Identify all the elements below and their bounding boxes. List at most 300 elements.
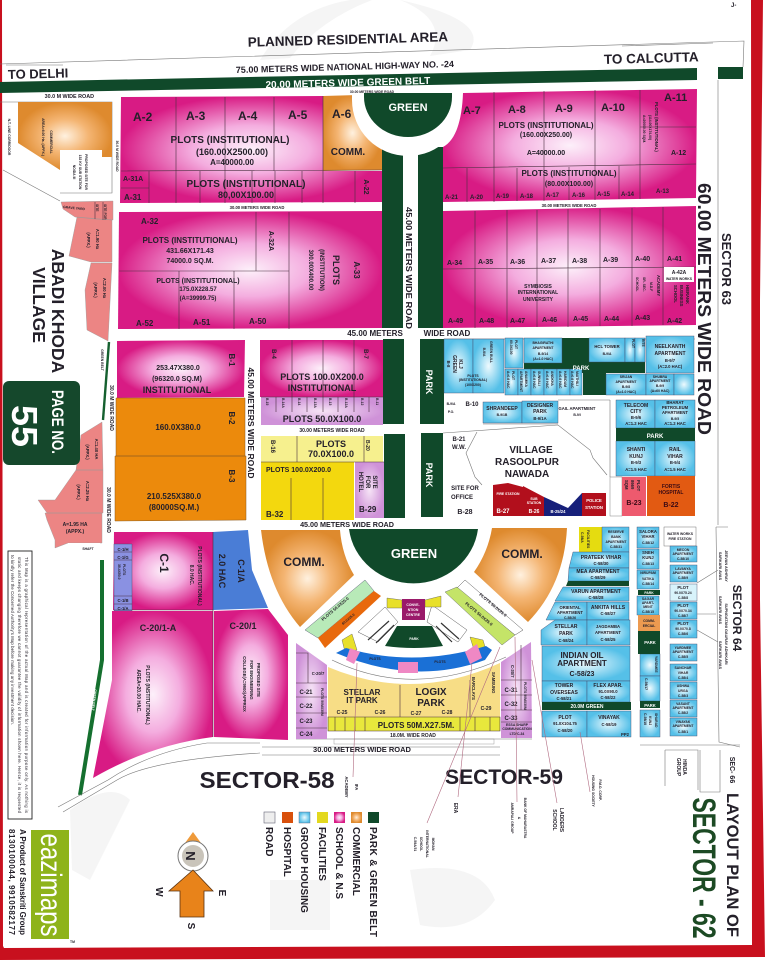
panel: group housing C-58 third column: FIRE STATION bbox=[668, 537, 692, 541]
panel: group housing C-58 second column: NIRUPAM bbox=[640, 571, 656, 575]
central plots and convention centre: CENTRE bbox=[406, 613, 421, 617]
green belt along highway bbox=[0, 67, 743, 94]
panel: lilac plots C-30 to C-33: C-31 bbox=[504, 688, 518, 694]
panel: group housing C-58 second column: SALORA bbox=[639, 529, 657, 534]
disclaimer box: This Map is a graphical representation of the actual Map and is created for information purpose only. As nothing is bbox=[24, 557, 29, 813]
pointer lines and tenant labels bbox=[344, 637, 602, 858]
panel: blocks A-32 to A-33 and A-50 to A-52: PLOTS (INSTITUTIONAL) bbox=[142, 236, 238, 245]
panel: lilac plots C-30 to C-33: COMMUNICATION bbox=[502, 727, 532, 731]
pointer lines and tenant labels: BANK OF MAHARASTRA bbox=[523, 798, 527, 839]
panel: group housing C-58 main column: C-58/22 bbox=[601, 695, 616, 700]
green belt along highway: 30.00 METERS WIDE ROAD bbox=[350, 90, 395, 94]
panel: blocks B-16 to B-32: PLOTS bbox=[316, 439, 346, 449]
panel: group housing B-8 to B-9: (100X200) bbox=[465, 383, 481, 387]
panel: Village Rasoolpur Nawada: 8669 bbox=[630, 480, 635, 490]
icon: compass: S bbox=[185, 923, 196, 930]
panel: group housing C-58 third column: YARDMEE bbox=[675, 646, 692, 650]
panel: group housing C-58 third column: WATER WORKS bbox=[667, 532, 694, 536]
panel: blocks A-2 to A-31 and A-6: PLOTS (INSTITUTIONAL) bbox=[171, 135, 289, 146]
legend: COMMERCIAL bbox=[350, 827, 361, 896]
panel: blocks A-32 to A-33 and A-50 to A-52: 431.66X171.43 bbox=[166, 248, 214, 255]
corner mark: J- bbox=[731, 3, 736, 9]
panel: blocks A-2 to A-31 and A-6: 80,00X100.00 bbox=[218, 190, 274, 200]
text: 30.00 METERS WIDE ROAD bbox=[299, 428, 365, 434]
panel: IT parks and lower plots: C-25 bbox=[337, 710, 348, 716]
panel: Village Rasoolpur Nawada: SQM bbox=[624, 480, 629, 490]
panel: blocks B-4 to B-15: B-12A bbox=[344, 398, 348, 408]
panel: C-1 and C-20 institutional plots: C-1/A bbox=[118, 606, 128, 611]
pointer lines and tenant labels: HOUSING SOCIETY bbox=[591, 775, 595, 808]
panel: blocks B-4 to B-15: B-4 bbox=[270, 349, 276, 359]
panel: group housing C-58 third column: C-58/4 bbox=[678, 676, 688, 680]
panel: blocks B-1 to B-3: B-3 bbox=[227, 470, 236, 483]
panel: salmon plots left: A=1.95 HA bbox=[63, 522, 88, 528]
panel: Village Rasoolpur Nawada: NAWADA bbox=[505, 469, 549, 480]
panel: group housing C-58 third column: VASANT bbox=[676, 702, 691, 706]
panel: blocks A-34 to A-49: A-34 bbox=[447, 260, 462, 267]
label: Abadi Khoda village: ABADI KHODA bbox=[48, 249, 68, 374]
panel: salmon plots left: (APPX.) bbox=[93, 282, 98, 298]
panel: group housing C-58 third column: C-58/5 bbox=[678, 655, 688, 659]
panel: group housing C-58 third column: 90.0X75.24 bbox=[674, 591, 692, 595]
panel: blocks A-34 to A-49: UNIVERSITY bbox=[523, 297, 554, 303]
label: sector 64 and housing notes: SUPNGATANI GAURAV ADHIKARI bbox=[724, 603, 728, 665]
panel: Village Rasoolpur Nawada: SUB bbox=[530, 497, 538, 501]
panel: blocks A-7 to A-21: A-15 bbox=[597, 192, 611, 198]
panel: group housing C-58 third column: C-58/3 bbox=[678, 694, 688, 698]
panel: IT parks and lower plots: PARK bbox=[417, 698, 446, 709]
panel: group housing B-8 to B-9: APARTMENT bbox=[532, 346, 554, 350]
panel: blocks A-7 to A-21: A-17 bbox=[546, 193, 560, 199]
panel: group housing B-8 to B-9: A=0.6 HAC bbox=[532, 371, 536, 389]
panel: blocks B-4 to B-15: B-14 bbox=[297, 398, 301, 405]
panel: blocks B-4 to B-15 bbox=[260, 339, 404, 425]
panel: group housing B-8 to B-9: ANAMIKA bbox=[524, 371, 528, 388]
central green semicircle and strips: 45.00 METERS WIDE ROAD bbox=[404, 207, 413, 329]
panel: blocks A-7 to A-21: (80.00X100.00) bbox=[545, 181, 593, 188]
panel: group housing C-58 main column: INDIAN OIL bbox=[560, 651, 604, 660]
panel: commercial site top left: 30.0 M WIDE ROAD bbox=[115, 140, 119, 172]
panel: group housing B-8 to B-9: SUNVALI bbox=[537, 371, 541, 386]
label: sector 63: SECTOR 63 bbox=[719, 233, 734, 305]
panel: commercial site top left: PROPOSED SITE FOR bbox=[84, 154, 88, 190]
road label: 45 meters vertical: 45.00 METERS WIDE ROAD bbox=[246, 368, 256, 478]
panel: blocks A-7 to A-21: A-9 bbox=[555, 103, 573, 115]
panel: IT parks and lower plots: SAMSUNG bbox=[491, 672, 496, 693]
panel: blocks B-16 to B-32: B-16 bbox=[269, 440, 275, 454]
panel: group housing C-58 second column: APART- bbox=[642, 601, 654, 605]
green belt and left road labels: 30.0 M WIDE ROAD bbox=[108, 385, 114, 431]
panel: blocks A-7 to A-21: A-12 bbox=[671, 150, 686, 157]
panel: blocks A-32 to A-33 and A-50 to A-52: A-52 bbox=[136, 319, 154, 328]
panel: blocks A-34 to A-49: A-41 bbox=[667, 256, 682, 263]
panel: blocks A-7 to A-21: A-8 bbox=[508, 104, 526, 116]
panel: group housing C-58 second column: SAGAR bbox=[642, 597, 655, 601]
panel: C-1 and C-20 institutional plots: C-1/G bbox=[117, 555, 129, 560]
commercial sector right: COMM. bbox=[501, 547, 543, 561]
panel: lilac plots C-30 to C-33: C-30/7 bbox=[510, 665, 515, 678]
panel: blocks A-34 to A-49: INTERNATIONAL bbox=[518, 290, 558, 296]
panel: IT parks and lower plots: IT PARK bbox=[346, 696, 378, 705]
panel: blocks A-32 to A-33 and A-50 to A-52: 300.00X400.00 bbox=[307, 250, 313, 291]
panel: group housing C-58 second column: ERCIAL bbox=[643, 624, 655, 628]
panel: group housing C-58 main column: C-58/20 bbox=[558, 728, 573, 733]
pointer lines and tenant labels: INTERNATIONAL bbox=[425, 830, 429, 858]
panel: group housing B-8 to B-9: A=1.2 HAC bbox=[625, 421, 647, 426]
panel: Village Rasoolpur Nawada: B-23 bbox=[626, 500, 642, 507]
panel: blocks A-34 to A-49: SR. SEC. bbox=[642, 277, 646, 292]
panel: group housing B-8 to B-9: A=0.6 HAC bbox=[545, 371, 549, 389]
panel: group housing C-58 third column: C-58/10 bbox=[677, 557, 689, 561]
panel: lilac plots C-30 to C-33: LTD/C-34 bbox=[510, 732, 524, 736]
label: sector 64 and housing notes: JEEVAN ASHRAY bbox=[724, 550, 728, 582]
pointer lines and tenant labels: ERA bbox=[452, 803, 458, 814]
panel: blocks A-32 to A-33 and A-50 to A-52: A-33 bbox=[352, 261, 361, 279]
panel: blocks A-2 to A-31 and A-6: A-3 bbox=[186, 109, 206, 123]
central plots and convention centre: CONVE- bbox=[406, 603, 420, 607]
panel: group housing C-58 third column: APARTMENT bbox=[672, 724, 694, 728]
panel: C-1 and C-20 institutional plots: 8.0 HAC. bbox=[188, 565, 194, 586]
panel: group housing C-58 second column: C-58/13 bbox=[642, 562, 654, 566]
panel: group housing C-58 main column: PLOT bbox=[558, 715, 572, 721]
panel: blocks A-7 to A-21: A-10 bbox=[601, 102, 625, 114]
pointer lines and tenant labels: & bbox=[517, 817, 521, 820]
central green amphitheatre bbox=[349, 529, 478, 583]
heading: layout plan of sector 62: LAYOUT PLAN OF bbox=[723, 793, 742, 937]
panel: group housing B-8 to B-9: BHAGIRATHI bbox=[532, 341, 554, 345]
panel: C-1 and C-20 institutional plots: COLLEGE(A=9900)APPROX bbox=[242, 656, 247, 712]
panel: group housing B-8 to B-9: 60.0X100 bbox=[509, 340, 513, 355]
panel: blocks A-34 to A-49: SCHOOL bbox=[673, 285, 678, 303]
panel: group housing B-8 to B-9: PLOTS bbox=[467, 374, 479, 378]
panel: blocks A-34 to A-49: A-37 bbox=[541, 258, 556, 265]
panel: group housing C-58 second column: MENT bbox=[643, 605, 654, 609]
panel: blocks A-7 to A-21: PLOTS (INSTITUTIONAL) bbox=[521, 169, 617, 178]
panel: blocks A-2 to A-31 and A-6: A-31 bbox=[124, 193, 142, 202]
road label: 30 meters wide road bottom: 30.00 METERS WIDE ROAD bbox=[313, 745, 412, 754]
panel: blocks B-1 to B-3: B-2 bbox=[227, 412, 236, 425]
panel: group housing C-58 main column: APARTMENT bbox=[557, 610, 583, 615]
label: sector 64 and housing notes: SARKARI AVAS bbox=[718, 641, 722, 670]
panel: blocks B-16 to B-32: 70.0X100.0 bbox=[308, 449, 354, 459]
panel: group housing C-58 third column: C-58/2 bbox=[678, 711, 688, 715]
road label: 45 meters wide road: 45.00 METERS bbox=[347, 329, 403, 338]
panel: blocks A-34 to A-49: A-45 bbox=[573, 316, 588, 323]
commercial sector left bbox=[261, 530, 354, 627]
panel: blocks A-7 to A-21: A=20000.00 SQM. bbox=[642, 115, 646, 143]
panel: group housing C-58 second column: C-58/17 bbox=[644, 678, 648, 690]
national highway road: 75.00 METERS WIDE NATIONAL HIGH-WAY NO. -24 bbox=[236, 59, 454, 75]
panel: group housing C-58 main column: VINAYAK bbox=[598, 715, 620, 721]
panel: group housing C-58 third column: 90.0X70.34 bbox=[674, 609, 692, 613]
panel: group housing C-58 main column: APARTMENT bbox=[557, 659, 607, 668]
panel: group housing C-58 main column: VARUN APARTMENT bbox=[571, 589, 621, 595]
logo: eazimaps: eazimaps bbox=[34, 834, 67, 936]
panel: blocks B-16 to B-32 bbox=[261, 434, 405, 520]
panel: blocks A-32 to A-33 and A-50 to A-52: 74000.0 SQ.M. bbox=[166, 258, 214, 265]
panel: group housing C-58 main column: ORIENTAL bbox=[559, 605, 581, 610]
panel: group housing B-8 to B-9: A=1.5 HAC bbox=[625, 467, 647, 472]
panel: blocks B-16 to B-32: B-20 bbox=[364, 440, 370, 451]
panel: lilac plots C-21 to C-24: PLOTS 50MX30M bbox=[320, 688, 324, 716]
panel: salmon plots left bbox=[38, 201, 113, 558]
panel: blocks A-34 to A-49: A-48 bbox=[479, 318, 494, 325]
panel: group housing B-8 to B-9: A=0.6 HAC bbox=[506, 371, 510, 389]
panel: commercial site top left: 30.0 M WIDE ROAD bbox=[45, 94, 94, 100]
panel: group housing B-8 to B-9: SRIJAN bbox=[620, 375, 633, 379]
panel: blocks B-1 to B-3: 160.0X380.0 bbox=[155, 423, 201, 432]
panel: group housing C-58 third column: APARTMENT bbox=[672, 571, 694, 575]
panel: group housing C-58 main column: C-58/19 bbox=[602, 722, 617, 727]
panel: blocks B-1 to B-3: (80000SQ.M.) bbox=[149, 503, 199, 512]
panel: blocks A-7 to A-21: A-16 bbox=[572, 193, 586, 199]
panel: group housing B-8 to B-9: KLJ bbox=[457, 359, 463, 369]
central green semicircle and strips: GREEN bbox=[388, 102, 428, 114]
panel: lilac plots C-21 to C-24: C-24 bbox=[299, 732, 313, 738]
panel: C-1 and C-20 institutional plots: 35.4X50.0 bbox=[117, 564, 121, 580]
panel: commercial site top left bbox=[0, 94, 119, 201]
pointer lines and tenant labels: ACADEMY bbox=[344, 776, 349, 798]
panel: group housing B-8 to B-9: SHANTI bbox=[627, 447, 646, 453]
panel: salmon plots left: GRAVE YARD bbox=[63, 205, 86, 211]
panel: salmon plots left: SITE bbox=[95, 204, 99, 212]
panel: C-1 and C-20 institutional plots: C-1 bbox=[157, 553, 171, 573]
panel: blocks A-34 to A-49: SCHOOL bbox=[635, 277, 639, 292]
panel: blocks A-32 to A-33 and A-50 to A-52: A-32A bbox=[267, 231, 274, 251]
panel: IT parks and lower plots: PLOTS 50M.X27.5M. bbox=[378, 721, 454, 730]
label: Hinda group and Sec-66: SEC- 66 bbox=[728, 757, 735, 783]
pointer lines and tenant labels: SCHOOL bbox=[551, 809, 557, 831]
panel: group housing C-58 second column: C-58/12 bbox=[642, 541, 654, 545]
panel: group housing B-8 to B-9: GAIL APARTMENT bbox=[559, 406, 596, 411]
panel: group housing C-58 second column: VATIKA bbox=[642, 577, 655, 581]
panel: IT parks and lower plots: C-28 bbox=[442, 710, 453, 716]
panel: blocks B-16 to B-32: FOR bbox=[364, 476, 370, 489]
panel: group housing B-8 to B-9: B-9/A bbox=[447, 402, 456, 406]
logo: eazimaps: TM bbox=[70, 940, 75, 944]
panel: salmon plots left: (APPX.) bbox=[86, 232, 91, 248]
panel: group housing B-8 to B-9: B-9/4 bbox=[670, 460, 681, 465]
panel: group housing B-8 to B-9: PARK bbox=[573, 366, 590, 372]
panel: lilac plots C-21 to C-24: C-20/7 bbox=[312, 671, 325, 676]
panel: group housing C-58 main column: 91.0X104.75 bbox=[553, 721, 578, 726]
panel: blocks A-34 to A-49: A-47 bbox=[510, 318, 525, 325]
panel: group housing C-58 main column: TOWER bbox=[555, 683, 574, 689]
icon: compass bbox=[153, 832, 227, 930]
panel: blocks B-1 to B-3: INSTITUTIONAL bbox=[143, 385, 212, 395]
panel: group housing C-58 second column: PARK bbox=[644, 640, 656, 645]
panel: park strips: PARK bbox=[424, 370, 434, 395]
panel: group housing B-8 to B-9: B-9/8 bbox=[622, 385, 630, 389]
panel: group housing B-8 to B-9: PLOT bbox=[631, 339, 635, 349]
legend: PARK & GREEN BELT bbox=[367, 827, 378, 937]
panel: Village Rasoolpur Nawada: B-26 bbox=[529, 509, 540, 515]
panel: group housing C-58 second column: PARK bbox=[644, 703, 656, 708]
panel: salmon plots left: A=1.40 HA bbox=[94, 439, 99, 459]
panel: group housing B-8 to B-9: A=1.5 HAC bbox=[664, 467, 686, 472]
central plots and convention centre bbox=[305, 580, 523, 673]
panel: group housing C-58 main column: C-58/24 bbox=[559, 638, 574, 643]
panel: group housing B-8 to B-9: NEELKANTH bbox=[655, 344, 686, 350]
panel: blocks A-34 to A-49: WATER WORKS bbox=[666, 277, 693, 281]
panel: IT parks and lower plots: 18.0M. WIDE ROAD bbox=[390, 733, 436, 739]
panel: blocks A-34 to A-49: SYMBIOSIS bbox=[524, 284, 553, 290]
text: 30.00 METERS WIDE ROAD bbox=[542, 203, 596, 208]
central plots and convention centre: PLOTS 50.0X25.0 bbox=[478, 592, 508, 618]
panel: blocks A-34 to A-49: A-42 bbox=[667, 318, 682, 325]
contact text: 8130100044, 9910582177 bbox=[7, 829, 16, 936]
panel: Village Rasoolpur Nawada: B-25/24 bbox=[551, 509, 566, 514]
panel: Village Rasoolpur Nawada: W.W. bbox=[452, 445, 466, 451]
panel: blocks B-4 to B-15: B-15 bbox=[265, 398, 269, 405]
panel: blocks A-7 to A-21: A-11 bbox=[664, 92, 687, 104]
panel: blocks A-32 to A-33 and A-50 to A-52: (A=39999.75) bbox=[180, 296, 216, 302]
panel: group housing C-58 second column: SHARAD bbox=[654, 713, 658, 728]
panel: group housing B-8 to B-9: B-9/6 bbox=[631, 415, 642, 420]
panel: blocks A-2 to A-31 and A-6 bbox=[120, 95, 382, 203]
logo: eazimaps bbox=[31, 830, 75, 944]
panel: group housing B-8 to B-9: HARIDAM bbox=[563, 371, 567, 387]
panel: group housing B-8 to B-9: HCL TOWER bbox=[594, 344, 620, 349]
panel: blocks A-7 to A-21: A-21 bbox=[445, 195, 459, 201]
panel: blocks A-7 to A-21: A-20 bbox=[470, 195, 484, 201]
panel: blocks B-4 to B-15: B-12 bbox=[360, 398, 364, 405]
panel: group housing C-58 third column: PLOT bbox=[677, 603, 689, 608]
panel: group housing C-58 main column: PP2 bbox=[621, 732, 630, 737]
panel: group housing B-8 to B-9: B-8/A bbox=[482, 348, 486, 357]
disclaimer box: static and keeps changing therefore we cannot guarantee the validity of information shown here. Hence, it is requested bbox=[17, 557, 22, 814]
panel: lilac plots C-21 to C-24: C-21 bbox=[299, 690, 313, 696]
panel: lilac plots C-21 to C-24: C-23 bbox=[299, 719, 313, 725]
panel: group housing C-58 third column: C-58/8 bbox=[678, 596, 688, 600]
panel: group housing C-58 main column: APARTMENT bbox=[595, 630, 621, 635]
panel: C-1 and C-20 institutional plots: C-20/1 bbox=[229, 621, 257, 631]
panel: group housing C-58 third column: C-58/1 bbox=[678, 730, 688, 734]
pointer lines and tenant labels: P.M.O. CORP. bbox=[598, 779, 602, 801]
text: 30.00 METERS WIDE ROAD bbox=[230, 205, 284, 210]
panel: group housing B-8 to B-9: APARTMENT bbox=[662, 410, 688, 415]
panel: group housing B-8 to B-9: B-8 bbox=[446, 361, 451, 368]
panel: lilac plots C-30 to C-33: PLOTS 50MX30M bbox=[523, 682, 527, 710]
panel: group housing B-8 to B-9: GREEN bbox=[451, 355, 457, 373]
central plots and convention centre: PLOTS bbox=[369, 657, 381, 661]
panel: group housing C-58 main column: C-58/26 bbox=[564, 616, 576, 620]
panel: Village Rasoolpur Nawada: OFFICE bbox=[451, 495, 473, 501]
road label: 45 meters wide road: WIDE ROAD bbox=[424, 329, 471, 338]
panel: group housing C-58 third column: PLOT bbox=[677, 621, 689, 626]
commercial sector right bbox=[474, 528, 567, 622]
green belt along highway: 20.00 METERS WIDE GREEN BELT bbox=[265, 76, 430, 91]
panel: group housing C-58 third column: C-58/9 bbox=[678, 576, 688, 580]
legend bbox=[263, 812, 379, 937]
panel: C-1 and C-20 institutional plots: C-1/H bbox=[118, 547, 128, 552]
panel: blocks A-7 to A-21: (160.00X250.00) bbox=[520, 132, 572, 139]
label: sector 64 and housing notes: SECTOR 64 bbox=[730, 585, 744, 652]
panel: group housing C-58 third column: VIHAR bbox=[678, 671, 689, 675]
panel: group housing C-58 main column: 20.0M GREEN bbox=[570, 704, 604, 710]
panel: Village Rasoolpur Nawada: B-28 bbox=[457, 509, 473, 516]
panel: Village Rasoolpur Nawada: B-21 bbox=[452, 437, 466, 443]
panel: blocks A-34 to A-49: A-38 bbox=[572, 258, 587, 265]
panel: group housing B-8 to B-9 bbox=[443, 336, 695, 485]
panel: blocks A-7 to A-21: A-18 bbox=[520, 194, 534, 200]
panel: group housing B-8 to B-9: B-10 bbox=[465, 402, 479, 408]
panel: Village Rasoolpur Nawada: RASOOLPUR bbox=[495, 457, 560, 468]
panel: blocks A-2 to A-31 and A-6: A-6 bbox=[332, 107, 352, 121]
panel: blocks A-7 to A-21: PLOTS (INSTITUTIONAL) bbox=[498, 121, 594, 130]
panel: group housing C-58 main column: C-58/21 bbox=[557, 696, 572, 701]
panel: lilac plots C-30 to C-33: C-33 bbox=[504, 716, 518, 722]
central plots and convention centre: PLOTS 50.0X25.0 bbox=[464, 601, 494, 627]
panel: group housing C-58 second column: SNEH bbox=[642, 550, 654, 555]
panel: lilac plots C-30 to C-33: C-32 bbox=[504, 702, 518, 708]
panel: blocks A-32 to A-33 and A-50 to A-52: PLOTS bbox=[331, 255, 341, 285]
panel: group housing C-58 second column: KUNJ bbox=[642, 555, 654, 560]
panel: salmon plots left: A=1.90 Ha bbox=[95, 229, 100, 250]
pointer lines and tenant labels: LADDERS bbox=[558, 808, 564, 833]
panel: blocks B-16 to B-32: HOTEL bbox=[357, 472, 363, 492]
panel: group housing C-58 third column: MECON bbox=[677, 548, 690, 552]
panel: group housing B-8 to B-9: GREEN BULL bbox=[489, 341, 493, 363]
panel: IT parks and lower plots: LOGIX bbox=[415, 687, 447, 698]
panel: group housing B-8 to B-9: B-9/A bbox=[603, 352, 612, 356]
panel: salmon plots left: A=2.25 Ha bbox=[85, 481, 90, 502]
panel: blocks A-32 to A-33 and A-50 to A-52: A-50 bbox=[249, 317, 267, 326]
label: Hinda group and Sec-66: HINDA bbox=[681, 759, 687, 775]
panel: blocks B-1 to B-3: 210.525X380.0 bbox=[147, 492, 202, 501]
panel: group housing C-58 main column: PARK bbox=[559, 631, 573, 637]
panel: group housing C-58 third column: USHWA bbox=[677, 684, 690, 688]
central green amphitheatre: GREEN bbox=[391, 546, 437, 561]
panel: blocks B-1 to B-3 bbox=[115, 340, 246, 521]
panel: group housing B-8 to B-9: APARTMENT bbox=[519, 371, 523, 393]
panel: group housing B-8 to B-9: B-9/5 bbox=[671, 417, 679, 421]
disclaimer box bbox=[8, 551, 32, 819]
panel: group housing C-58 second column bbox=[637, 527, 660, 737]
panel: blocks A-32 to A-33 and A-50 to A-52: PLOTS (INSTITUTIONAL) bbox=[156, 278, 240, 285]
label: sector 64 and housing notes: SARKARI AVAS bbox=[718, 596, 722, 625]
panel: lilac plots C-30 to C-33: ESSA SHARP bbox=[506, 723, 529, 727]
panel: Village Rasoolpur Nawada: HOSPITAL bbox=[659, 490, 683, 496]
panel: group housing B-8 to B-9: B-9/1A bbox=[533, 416, 547, 421]
panel: blocks A-34 to A-49: HIERANK bbox=[685, 285, 690, 304]
label: Abadi Khoda village: VILLAGE bbox=[29, 267, 49, 343]
panel: group housing C-58 second column: C-58/18 bbox=[643, 713, 647, 725]
panel: Village Rasoolpur Nawada: PLOT bbox=[636, 480, 641, 492]
panel: blocks B-4 to B-15: B-13A bbox=[313, 398, 317, 408]
panel: group housing B-8 to B-9: KUNJ bbox=[629, 454, 643, 460]
commercial sector left: COMM. bbox=[283, 555, 325, 569]
label: Abadi Khoda village bbox=[29, 249, 68, 374]
icon: compass: N bbox=[183, 851, 198, 861]
panel: blocks A-7 to A-21: A-19 bbox=[496, 194, 510, 200]
panel: group housing C-58 third column: LAVANYA bbox=[675, 567, 691, 571]
panel: IT parks and lower plots: C-29 bbox=[481, 706, 492, 712]
panel: group housing C-58 main column: C-58/25 bbox=[601, 637, 616, 642]
panel: group housing C-58 main column: FACILITIES bbox=[586, 530, 590, 549]
panel: group housing B-8 to B-9: PLOT bbox=[511, 371, 515, 381]
panel: commercial site top left: 132 KV SUB STATION bbox=[78, 155, 82, 190]
panel: blocks A-32 to A-33 and A-50 to A-52: A-32 bbox=[141, 217, 159, 226]
panel: blocks A-34 to A-49: A-46 bbox=[542, 317, 557, 324]
panel: lilac plots C-21 to C-24: C-22 bbox=[299, 704, 313, 710]
panel: blocks A-32 to A-33 and A-50 to A-52: 175.0X228.57 bbox=[179, 287, 217, 293]
panel: group housing C-58 main column: 91.0X90.0 bbox=[598, 689, 618, 694]
pointer lines and tenant labels: SCHOOL bbox=[419, 837, 423, 851]
panel: blocks A-2 to A-31 and A-6: A-31A bbox=[123, 176, 143, 183]
panel: group housing B-8 to B-9: PARK bbox=[647, 434, 664, 440]
panel: blocks A-34 to A-49: A-39 bbox=[603, 257, 618, 264]
